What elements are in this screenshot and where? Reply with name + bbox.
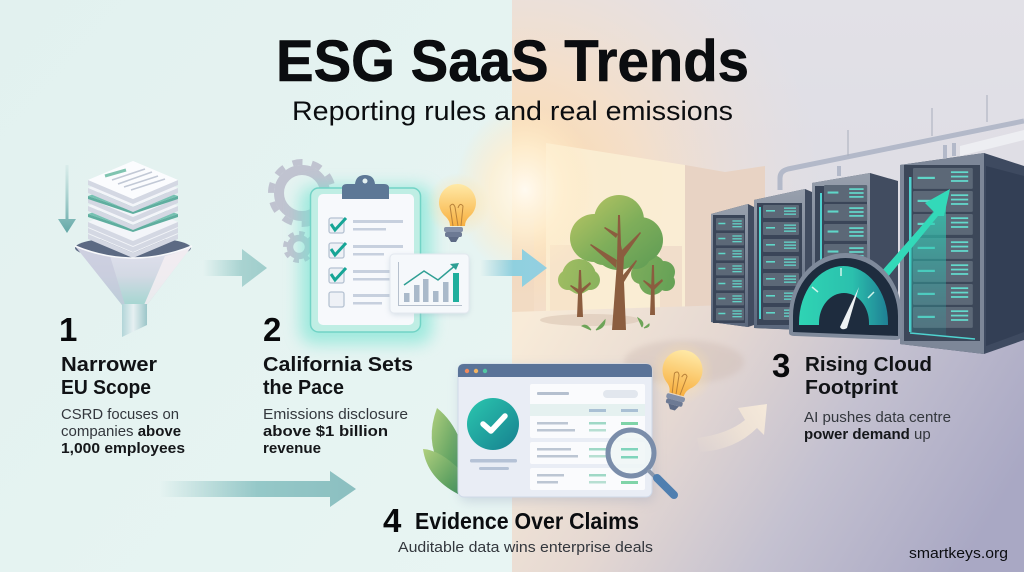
background: left mint half	[0, 0, 512, 572]
icon: clipboard checklist	[300, 175, 469, 344]
watermark: smartkeys.org	[909, 545, 1008, 562]
arrow: step 1 to step 2	[203, 249, 267, 287]
text block: step 1: CSRD focuses on	[61, 406, 179, 423]
sprouts	[582, 318, 649, 330]
icon: lightbulb upper	[426, 173, 490, 242]
arrow: curved faint arrow to step 3	[697, 404, 767, 452]
icon: lightbulb lower	[650, 340, 714, 415]
icon: speed gauge	[789, 253, 902, 340]
title: ESG SaaS Trends	[276, 29, 749, 94]
text block: step 4: Auditable data wins enterprise deals	[398, 539, 653, 556]
rack 3	[812, 173, 898, 330]
text block: step 3: 3	[772, 347, 790, 384]
big tree	[570, 195, 663, 330]
rack 2	[754, 189, 812, 330]
icon: dashboard window	[458, 364, 654, 501]
icon: server racks	[711, 153, 1024, 354]
arrow: rising teal trend	[881, 189, 950, 336]
decoration: pipes above servers	[780, 95, 1024, 190]
text block: step 2: 2	[263, 311, 281, 348]
arrow: step 2 to step 3	[480, 249, 547, 287]
text block: step 1: 1,000 employees	[61, 440, 185, 457]
text block: step 2: California Sets	[263, 354, 413, 376]
icon: funnel with documents	[58, 161, 192, 337]
icon: leaves	[423, 408, 460, 494]
icon: magnifying glass	[608, 430, 674, 495]
icon: gears	[271, 162, 333, 261]
text block: step 1: companies above	[61, 423, 181, 440]
text block: step 2: the Pace	[263, 377, 344, 399]
rack 4	[900, 153, 1024, 354]
text block: step 4	[383, 502, 653, 556]
rack 1	[711, 204, 754, 327]
text block: step 2: revenue	[263, 440, 321, 457]
chart card	[390, 254, 469, 315]
data table panels	[530, 384, 645, 490]
icon: trees	[540, 195, 675, 330]
small tree right	[631, 255, 675, 315]
text block: step 4: Evidence Over Claims	[415, 508, 639, 534]
text block: step 3	[772, 347, 951, 443]
text block: step 2: above $1 billion	[263, 423, 388, 440]
text block: step 1: Narrower	[61, 354, 157, 376]
checklist rows	[329, 218, 403, 307]
text block: step 1: 1	[59, 311, 77, 348]
text block: step 3: power demand up	[804, 426, 931, 443]
small tree left	[558, 259, 600, 317]
arrow: downward into funnel	[58, 165, 76, 233]
text block: step 4: 4	[383, 502, 402, 539]
text block: step 1: EU Scope	[61, 377, 151, 399]
text block: step 3: Rising Cloud	[805, 354, 932, 376]
text block: step 3: AI pushes data centre	[804, 409, 951, 426]
text block: step 2: Emissions disclosure	[263, 406, 408, 423]
text block: step 1	[59, 311, 185, 457]
text block: step 2	[263, 311, 413, 457]
check badge	[467, 398, 519, 450]
arrow: bottom long arrow to step 4	[160, 471, 356, 507]
background: right warm-to-lilac scene	[455, 0, 1024, 572]
subtitle: Reporting rules and real emissions	[292, 96, 733, 126]
text block: step 3: Footprint	[805, 377, 898, 399]
